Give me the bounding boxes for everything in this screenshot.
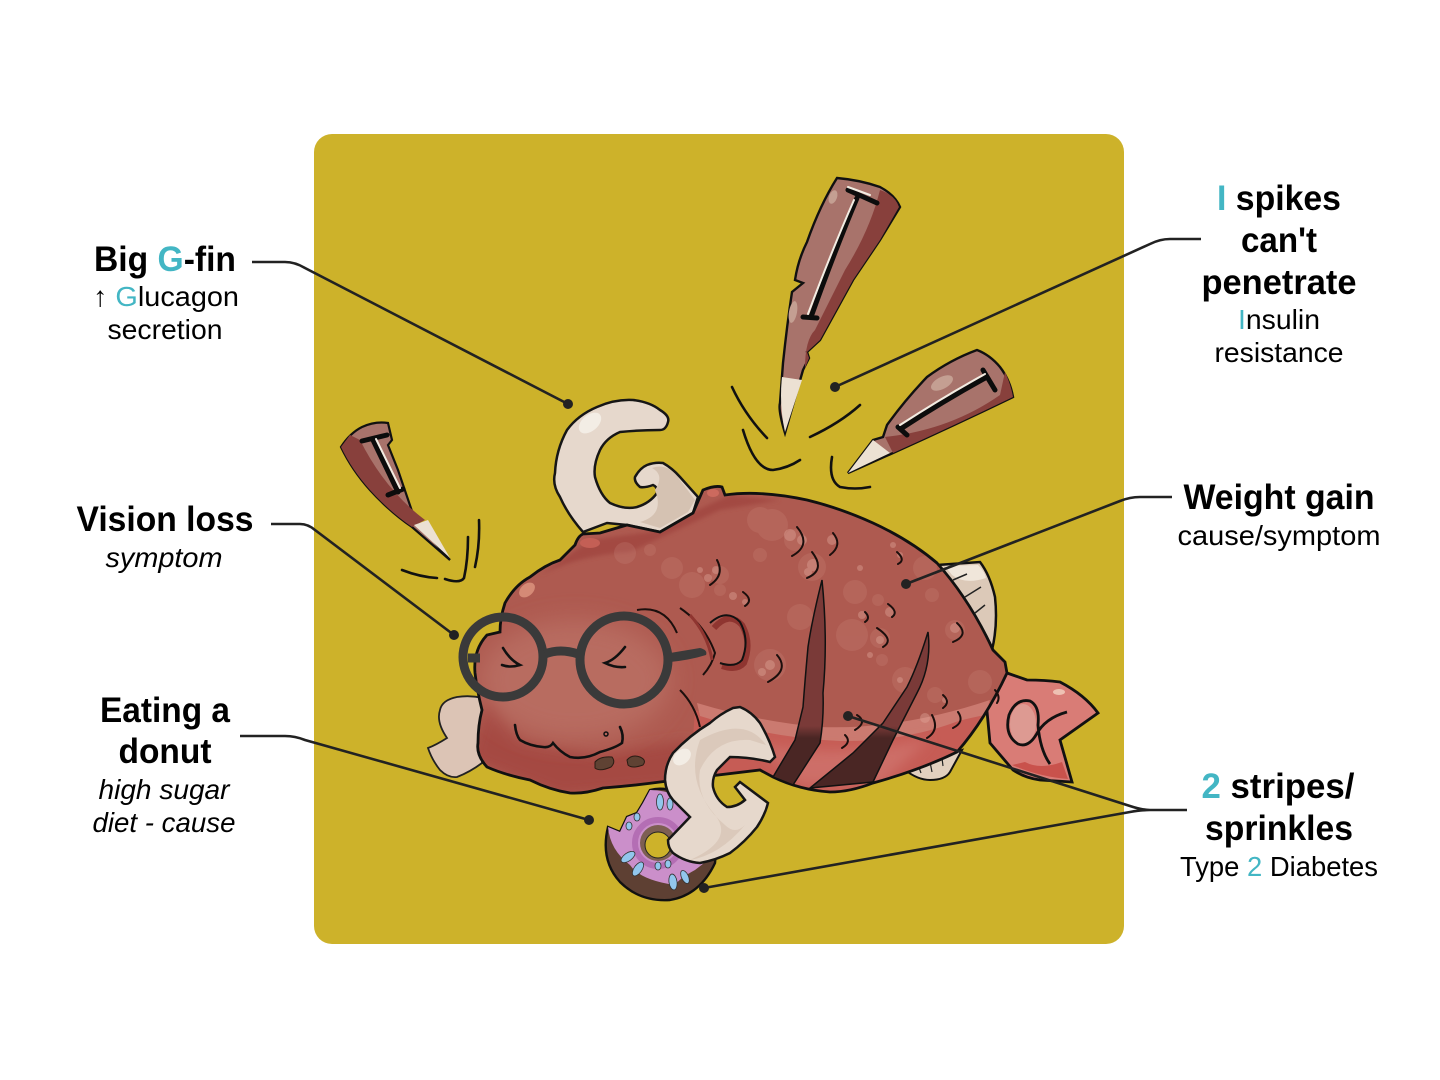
background panel xyxy=(314,134,1124,944)
callout: I spikes: Insulin xyxy=(1238,304,1320,335)
belly low highlight xyxy=(774,742,918,786)
illustration: fish with diabetes xyxy=(341,178,1098,900)
callout: vision loss xyxy=(76,500,459,640)
icon: round glasses xyxy=(463,616,706,704)
callout: weight gain xyxy=(901,478,1380,589)
callout: eating a donut xyxy=(92,691,594,838)
icon: gill and head creases xyxy=(637,608,748,727)
skin texture spots xyxy=(614,507,992,703)
callout: big G-fin: ↑ Glucagon xyxy=(93,281,239,312)
impact lines xyxy=(402,387,870,581)
icon: upper back fin xyxy=(937,562,996,650)
icon: fish body xyxy=(470,486,1007,800)
icon: body scale marks xyxy=(710,527,999,748)
callout: vision loss: symptom xyxy=(106,542,222,573)
shading: top rim xyxy=(553,496,770,568)
icon: left cheek fin xyxy=(428,696,483,777)
icon: large insulin spike xyxy=(780,178,900,433)
shading: head dark rim xyxy=(479,710,682,792)
callout: weight gain: Weight gain xyxy=(1184,478,1374,517)
callout: 2 stripes and sprinkles: sprinkles xyxy=(1205,809,1353,848)
icon: two dark stripes xyxy=(773,580,929,788)
icon: mouth xyxy=(515,725,644,770)
callout: weight gain: cause/symptom xyxy=(1178,520,1380,551)
callout: big G-fin: Big G-fin xyxy=(94,240,236,279)
icon: donut xyxy=(606,789,716,900)
icon: small back bumps xyxy=(516,489,719,600)
callout: eating a donut: Eating a xyxy=(100,691,231,730)
icon: fish tail xyxy=(985,673,1098,782)
callout: big G-fin xyxy=(93,240,573,409)
callout: I spikes: resistance xyxy=(1214,337,1344,368)
shading: head highlight xyxy=(480,620,670,740)
belly band xyxy=(697,700,990,741)
callout: vision loss: Vision loss xyxy=(76,500,254,539)
callout: I spikes: penetrate xyxy=(1202,263,1356,302)
belly red xyxy=(694,701,991,790)
icon: right insulin spike xyxy=(848,350,1013,473)
callout: I spikes xyxy=(830,179,1356,392)
callout: I spikes: I spikes xyxy=(1217,179,1341,218)
icon: pectoral G fin xyxy=(665,707,775,863)
callout: eating a donut: donut xyxy=(118,732,212,771)
icon: lower belly fin xyxy=(905,750,962,780)
icon: left insulin spike xyxy=(341,422,450,560)
icon: big G dorsal fin xyxy=(554,400,698,532)
callout: 2 stripes and sprinkles: 2 stripes/ xyxy=(1202,767,1355,806)
callout: I spikes: can't xyxy=(1241,221,1317,260)
icon: closed eyes xyxy=(502,647,625,667)
callout: 2 stripes and sprinkles: Type 2 Diabetes xyxy=(1180,851,1378,882)
callout: eating a donut: diet - cause xyxy=(92,807,236,838)
callout: eating a donut: high sugar xyxy=(98,774,231,805)
callout: 2 stripes and sprinkles xyxy=(699,711,1378,893)
callout: big G-fin: secretion xyxy=(108,314,222,345)
